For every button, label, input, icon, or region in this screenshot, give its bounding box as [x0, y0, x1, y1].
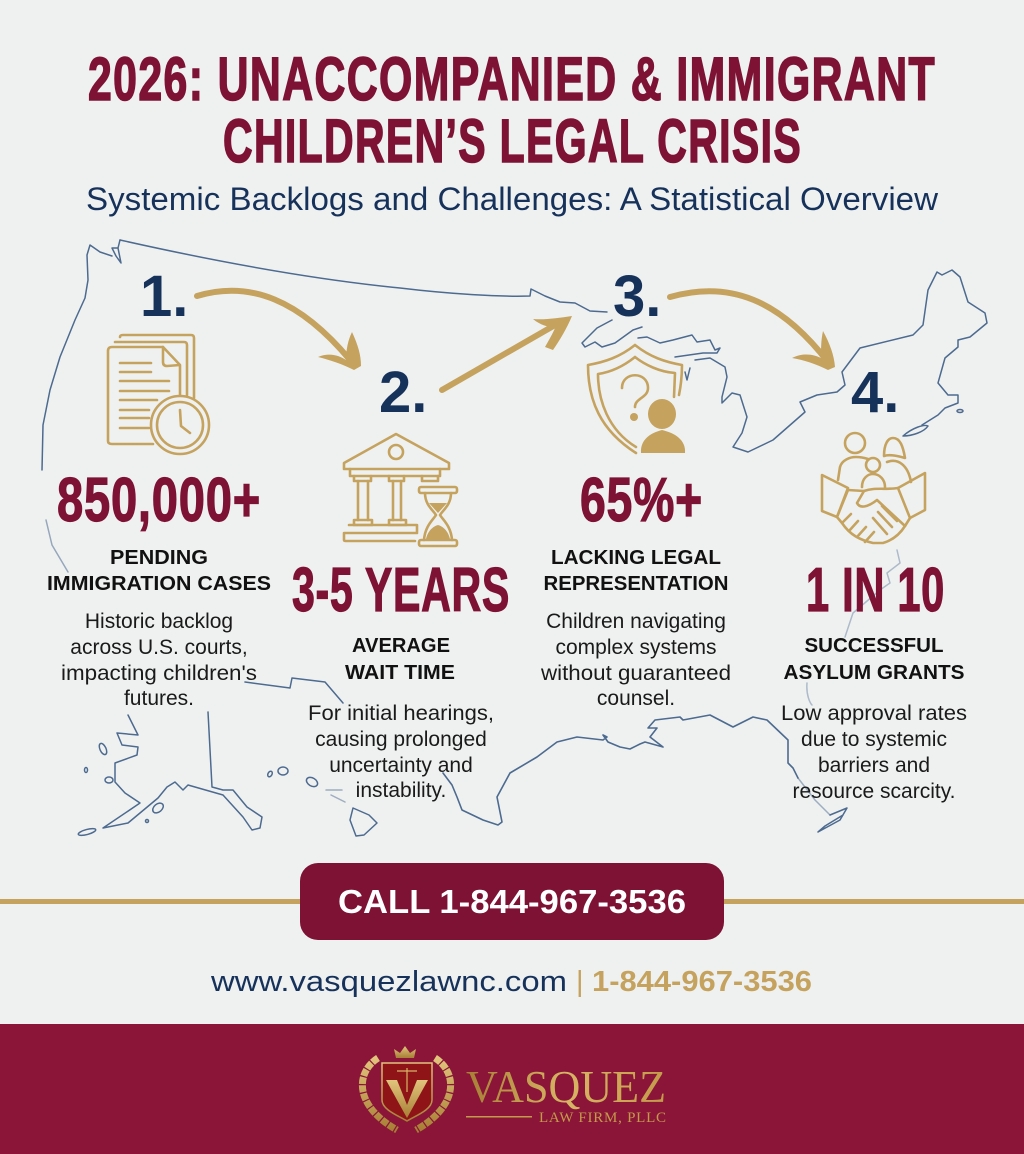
- description: due to systemic: [801, 728, 947, 751]
- label: ASYLUM GRANTS: [784, 662, 964, 684]
- tagline: LAW FIRM, PLLC: [539, 1110, 666, 1126]
- label: IMMIGRATION CASES: [47, 573, 271, 595]
- label: [784, 635, 964, 684]
- background map of the United States: [42, 240, 987, 837]
- footer band: [0, 1024, 1024, 1154]
- stat: 850,000+: 850,000+: [57, 466, 261, 535]
- panel: lacking legal representation: [540, 264, 731, 710]
- stat: 3-5 years: 3-5 YEARS: [292, 556, 510, 625]
- panel: average wait time: [292, 360, 510, 802]
- description: Low approval rates: [781, 702, 967, 725]
- arrow: step 2 to step 3: [442, 316, 572, 390]
- label: PENDING: [110, 547, 208, 569]
- contact line: 1-844-967-3536: [592, 966, 812, 998]
- label: [345, 635, 455, 684]
- panel: successful asylum grants: [781, 360, 967, 803]
- label: SUCCESSFUL: [804, 635, 944, 657]
- label: REPRESENTATION: [544, 573, 728, 595]
- description: [781, 702, 967, 803]
- step number 4: 4.: [851, 360, 899, 425]
- description: complex systems: [555, 636, 717, 659]
- description: causing prolonged: [315, 728, 487, 751]
- description: without guaranteed: [540, 662, 731, 685]
- label: [47, 547, 271, 595]
- contact line: www.vasquezlawnc.com: [210, 966, 567, 998]
- call to action button: [300, 863, 724, 940]
- description: counsel.: [597, 687, 675, 710]
- description: [308, 702, 494, 802]
- stat: 1 in 10: 1 IN 10: [806, 556, 945, 625]
- icon: letter V and scales: [386, 1068, 428, 1118]
- subtitle: Systemic Backlogs and Challenges: A Statistical Overview: [86, 181, 939, 217]
- icon: crown: [394, 1046, 416, 1058]
- description: uncertainty and: [329, 754, 473, 777]
- icon: documents with clock: [108, 335, 209, 454]
- description: For initial hearings,: [308, 702, 494, 725]
- label: [544, 547, 728, 595]
- description: Historic backlog: [85, 610, 233, 633]
- description: Children navigating: [546, 610, 726, 633]
- description: across U.S. courts,: [70, 636, 248, 659]
- label: LACKING LEGAL: [551, 547, 721, 569]
- call to action button: CALL 1-844-967-3536: [338, 883, 686, 920]
- step number 2: 2.: [379, 360, 427, 425]
- logo: Vasquez Law Firm: [362, 1046, 666, 1130]
- title: [88, 45, 936, 175]
- description: [540, 610, 731, 710]
- label: AVERAGE: [352, 635, 450, 657]
- icon: family with handshake: [822, 433, 925, 543]
- wordmark: VASQUEZ: [466, 1062, 666, 1112]
- gold divider line: [0, 899, 1024, 904]
- description: futures.: [124, 687, 194, 710]
- contact line: |: [576, 966, 584, 998]
- panel: pending immigration cases: [47, 264, 271, 710]
- description: impacting children's: [61, 662, 257, 685]
- description: barriers and: [818, 754, 930, 777]
- description: instability.: [356, 779, 446, 802]
- icon: courthouse with hourglass: [344, 434, 457, 546]
- icon: laurel wreath: [362, 1058, 451, 1130]
- description: [61, 610, 257, 710]
- description: resource scarcity.: [792, 780, 956, 803]
- icon: shield with question mark and person: [588, 345, 685, 453]
- stat: 65%+: 65%+: [580, 466, 703, 535]
- arrow: step 1 to step 2: [197, 291, 361, 370]
- step number 3: 3.: [613, 264, 661, 329]
- icon: shield: [382, 1063, 432, 1121]
- step number 1: 1.: [140, 264, 188, 329]
- arrow: step 3 to step 4: [670, 291, 835, 370]
- label: WAIT TIME: [345, 662, 455, 684]
- contact line: [210, 966, 812, 998]
